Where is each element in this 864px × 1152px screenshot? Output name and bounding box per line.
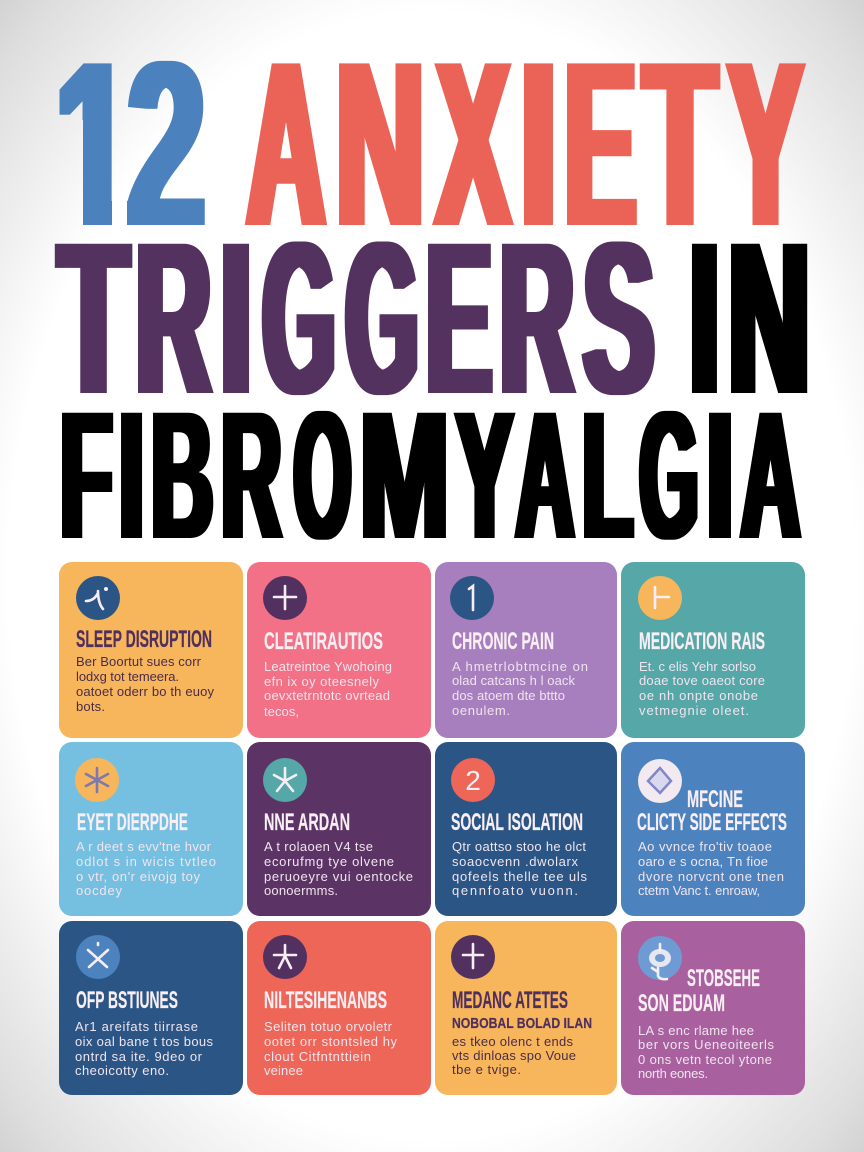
description: es tkeo olenc t ends [452,1034,574,1049]
heading [637,786,787,836]
description: dvore norvcnt one tnen [638,869,784,884]
heading: SOCIAL ISOLATION [451,809,583,836]
description: oevxtetrntotc ovrtead [264,688,390,703]
description: soaocvenn .dwolarx [452,854,578,869]
title word: TRIGGERS: G [346,197,418,439]
title word: FIBROMYALGIA: I [706,373,734,577]
title word: IN: I [690,197,719,439]
icon: number 2: 2 [465,765,481,796]
description: ctetm Vanc t. enroaw, [638,883,760,898]
title word: TRIGGERS: R [136,197,211,439]
icon: diamond [638,759,682,803]
panel: ofp bstiunes [59,921,243,1095]
panel: niltesihenanbs [247,921,431,1095]
icon: plus [263,576,307,620]
description: clout Citfntnttiein [264,1049,371,1064]
title word: ANXIETY: A [247,12,325,275]
title word: TRIGGERS: E [426,197,492,439]
icon: number 2 [451,758,495,802]
description: Leatreintoe Ywohoing [264,659,392,674]
description [264,1019,398,1078]
description: A r deet s evv'tne hvor [76,839,212,854]
description [76,839,216,898]
title word: FIBROMYALGIA: F [60,373,112,577]
panel: clicty side effects [621,742,805,916]
title word: FIBROMYALGIA: L [582,373,633,577]
description: tbe e tvige. [452,1062,521,1077]
title word: TRIGGERS: I [221,197,252,439]
description: Ao vvnce fro'tiv toaoe [638,839,772,854]
icon: tee mark [638,576,682,620]
description: Seliten totuo orvoletr [264,1019,393,1034]
description: A t rolaoen V4 tse [264,839,373,854]
heading [638,965,760,1017]
icon: asterisk [263,758,307,802]
title word: FIBROMYALGIA [60,373,800,577]
heading: STOBSEHE [687,965,760,992]
title word: FIBROMYALGIA: M [360,373,449,577]
title word: ANXIETY: X [436,12,510,275]
title word: ANXIETY: T [643,12,717,275]
title word: ANXIETY [247,12,803,275]
icon: crossed lines [76,935,120,979]
panel: stobsehe son eduam [621,921,805,1095]
description: ecorufmg tye olvene [264,854,394,869]
description: efn ix oy oteesnely [264,674,380,689]
description: odlot s in wicis tvtleo [76,854,216,869]
heading: CHRONIC PAIN [452,628,554,655]
icon: plus [451,935,495,979]
heading: NILTESIHENANBS [264,987,387,1014]
description: qennfoato vuonn. [452,883,578,898]
title: S [583,197,654,439]
heading: NNE ARDAN [264,809,350,836]
description [638,1023,774,1081]
heading: SON EDUAM [638,990,725,1017]
description: Et. c elis Yehr sorlso [639,659,756,674]
heading: MEDICATION RAIS [639,628,765,655]
description: cheoicotty eno. [75,1063,169,1078]
description: vetmegnie oleet. [639,703,749,718]
panel: sleep disruption [59,562,243,738]
title word: FIBROMYALGIA: G [640,373,698,577]
description [452,839,588,898]
panel: nne ardan [247,742,431,916]
description: vts dinloas spo Voue [452,1048,576,1063]
description: oix oal bane t tos bous [75,1034,214,1049]
panel: eyet dierpdhe [59,742,243,916]
description: A hmetrlobtmcine on [452,659,588,674]
title word: ANXIETY: I [520,12,557,275]
panel: medanc atetes [435,921,617,1095]
description: north eones. [638,1066,708,1081]
description: o vtr, on'r eivojg toy [76,869,200,884]
title number: 12: 2 [127,12,205,275]
title word: ANXIETY: N [336,12,424,275]
description [75,1019,214,1078]
description: oonoermms. [264,883,338,898]
description: tecos, [264,704,299,719]
title word: TRIGGERS: G [263,197,335,439]
title number: 12 [60,60,205,225]
heading: OFP BSTIUNES [76,987,178,1014]
description: LA s enc rlame hee [638,1023,754,1038]
panel: chronic pain [435,562,617,738]
description [264,839,413,898]
title word: TRIGGERS: T [58,197,129,439]
subheading: NOBOBAL BOLAD ILAN [452,1015,592,1032]
description: oe nh onpte onobe [639,688,758,703]
description: veinee [264,1063,303,1078]
title word: IN [690,197,810,439]
title [54,60,808,540]
description: Ber Boortut sues corr [76,654,202,669]
description [264,659,392,719]
description [76,654,214,714]
icon: asterisk [75,758,119,802]
description: Qtr oattso stoo he olct [452,839,586,854]
description: dos atoem dte bttto [452,688,565,703]
heading: MFCINE [687,786,743,813]
title word: FIBROMYALGIA: R [221,373,281,577]
title word: FIBROMYALGIA: A [516,373,574,577]
description: oaro e s ocna, Tn fioe [638,854,768,869]
description: lodxg tot temeera. [76,669,179,684]
description: 0 ons vetn tecol ytone [638,1052,772,1067]
panel: medication rais [621,562,805,738]
description [639,659,765,718]
description: Ar1 areifats tiirrase [75,1019,198,1034]
panel: clearing routines [247,562,431,738]
title word: FIBROMYALGIA: I [119,373,144,577]
title word: TRIGGERS: R [500,197,574,439]
description [638,839,784,898]
icon: moon figure [76,576,120,620]
description: ber vors Ueneoiteerls [638,1037,774,1052]
description: oenulem. [452,703,510,718]
heading: CLEATIRAUTIOS [264,628,383,655]
description: oatoet oderr bo th euoy [76,684,214,699]
description [452,1034,576,1077]
description: olad catcans h l oack [452,673,576,688]
description: qofeels thelle tee uls [452,869,588,884]
title number: 12: 1 [55,12,132,275]
heading: MEDANC ATETES [452,987,568,1014]
title word: TRIGGERS [58,197,654,439]
title word: FIBROMYALGIA: B [151,373,213,577]
description: bots. [76,699,105,714]
heading: SLEEP DISRUPTION [76,626,212,653]
icon: number 1 [450,576,494,620]
title word: FIBROMYALGIA: O [294,373,351,577]
description: ootet orr stontsled hy [264,1034,398,1049]
icon: figure [263,935,307,979]
title word: ANXIETY: E [565,12,636,275]
panel: social isolation [435,742,617,916]
icon: medical tool [638,936,682,980]
description: ontrd sa ite. 9deo or [75,1049,203,1064]
title word: FIBROMYALGIA: Y [456,373,513,577]
heading: EYET DIERPDHE [77,809,188,836]
description: peruoeyre vui oentocke [264,869,413,884]
description [452,659,588,718]
description: doae tove oaeot core [639,673,765,688]
description: oocdey [76,883,122,898]
